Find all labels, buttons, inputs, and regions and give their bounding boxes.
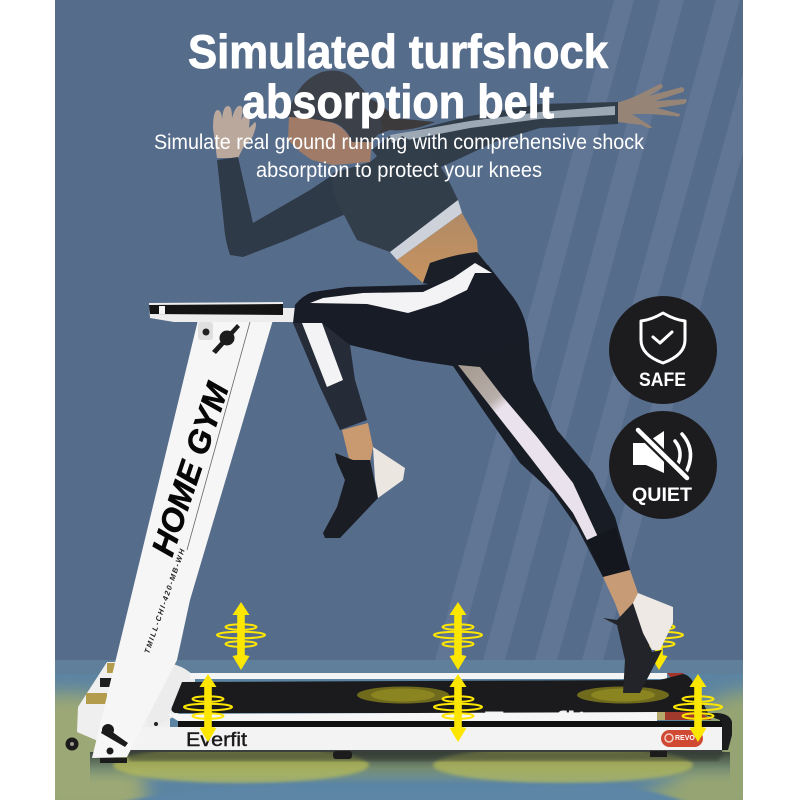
HOME GYM lettering: HOME GYM — [144, 377, 236, 560]
label: SAFE: SAFE — [639, 370, 686, 391]
bracket — [198, 322, 213, 340]
runner — [213, 70, 687, 693]
right ankle skin — [603, 570, 638, 617]
brand logo Everfit: Everfit — [186, 730, 248, 751]
left calf — [293, 323, 367, 430]
upright post — [92, 320, 273, 758]
label: QUIET: QUIET — [632, 485, 692, 506]
upper knob — [212, 324, 240, 354]
top white band — [390, 200, 462, 260]
left shoe — [323, 447, 405, 538]
treadmill — [66, 302, 732, 763]
arm stripe — [390, 106, 615, 143]
Revo badge: REVO — [675, 735, 695, 742]
running belt — [171, 674, 708, 713]
icon: shield — [641, 313, 685, 363]
shock arrows — [184, 602, 722, 742]
rail end red mark — [667, 673, 686, 679]
housing labels — [86, 663, 117, 704]
console and handle — [149, 302, 398, 323]
midriff — [397, 213, 478, 283]
front side panel — [130, 727, 722, 750]
feet — [333, 751, 667, 759]
base knob — [101, 724, 128, 754]
subtitle: absorption to protect your knees — [256, 158, 542, 182]
arrow behind shoe — [635, 602, 683, 670]
hair — [288, 70, 383, 142]
title line 2: absorption belt — [242, 75, 554, 128]
waistband — [423, 252, 490, 286]
belt pressure ellipses — [357, 686, 669, 704]
black strip — [178, 721, 722, 727]
black end cap — [700, 713, 732, 750]
post foot — [100, 758, 127, 763]
badge: quiet — [609, 411, 717, 519]
right leg — [453, 340, 630, 577]
crop top — [332, 136, 458, 252]
wheel — [66, 738, 78, 750]
left ankle skin — [342, 423, 373, 463]
subtitle: Simulate real ground running with comprehensive shock — [154, 130, 644, 154]
left leg white stripe — [302, 323, 343, 387]
hip white stripe — [310, 263, 492, 313]
hinge hub — [140, 662, 195, 730]
icon: muted speaker — [633, 430, 691, 478]
hips and thigh — [293, 265, 530, 380]
front arm sleeve — [217, 157, 372, 257]
rear arm — [372, 102, 618, 185]
rear motor housing — [77, 662, 170, 745]
belt logo: Everfit — [483, 708, 587, 731]
subtitle — [154, 130, 644, 182]
icon: check — [653, 332, 672, 343]
title — [188, 25, 609, 128]
right leg white stripe — [458, 365, 598, 540]
Revo badge — [661, 730, 703, 747]
right leg cuff — [587, 527, 630, 577]
upper side rail — [190, 673, 667, 679]
ponytail — [350, 90, 435, 140]
model number: TMILL-CHI-420-MB-WH — [142, 547, 187, 655]
lower white rail — [167, 712, 657, 721]
front hand — [213, 106, 256, 158]
lower rail red mark — [657, 712, 712, 720]
rear hand — [616, 84, 687, 128]
face — [288, 117, 372, 165]
background wall panel — [55, 0, 785, 660]
badge: safe — [609, 296, 717, 404]
right shoe — [603, 593, 673, 693]
dot — [154, 722, 158, 726]
title: Simulated turfshock — [188, 25, 609, 78]
floor — [40, 660, 760, 800]
